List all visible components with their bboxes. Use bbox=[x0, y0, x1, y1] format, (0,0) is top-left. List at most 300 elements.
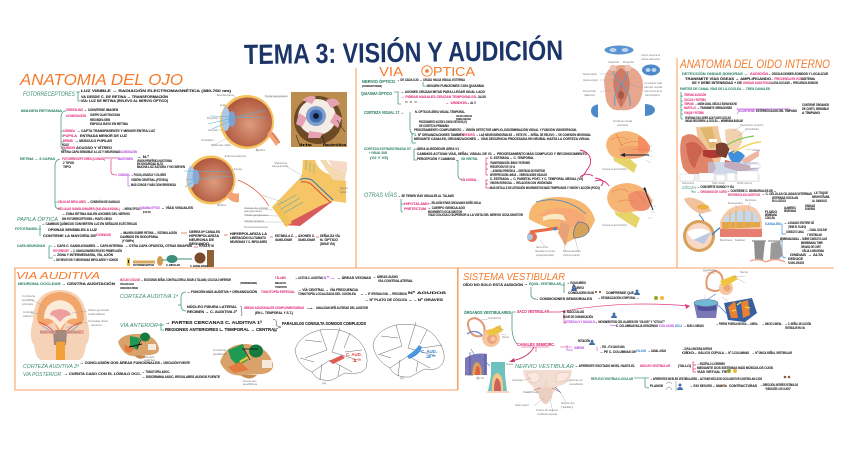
text block: cóclea: ÓRGANO DE CORTI bbox=[801, 244, 821, 249]
text block: neurona coclear bbox=[18, 274, 414, 290]
text block: corteza auditiva: TONOTOPÍA ESPECIAL bbox=[261, 289, 295, 294]
text block: imagen retiniana: REDONDEA SEMI bbox=[90, 117, 110, 122]
heading: anatomía del oído interno: ANATOMIA DEL OIDO INTERNO bbox=[679, 59, 830, 71]
text block: fotorreceptores bbox=[23, 88, 232, 103]
text block: retina: RETINA → 3 CAPAS bbox=[20, 156, 55, 161]
panel: vía óptica bbox=[361, 46, 663, 257]
text block: imagen retiniana: → CAPTA TRANSPARENTE Y MENOR ENTRA LUZ bbox=[77, 128, 156, 133]
image: ojo anatomía inferior bbox=[184, 154, 247, 207]
text block: retina bbox=[20, 154, 193, 214]
text block: fototransducción: → IMAGEN SOBRE RETINA → ESTIMULACIÓN bbox=[120, 230, 177, 235]
text block: nervio óptico: NERVIO ÓPTICO bbox=[362, 77, 395, 84]
text block: partes del oído: TÍMPANO bbox=[684, 101, 694, 106]
image: cresta ampular: Cresta bbox=[465, 373, 474, 377]
image: cerebro vía anterior pequeño bbox=[118, 332, 159, 362]
image: cabeza y vía auditiva: Núcleo geniculado bbox=[88, 308, 110, 312]
text block: cóclea: → CANAL COCLEAR bbox=[807, 227, 827, 232]
text block: corteza extraestriada: TRANSFORMACIÓN LÍNEAS Y PATRONES bbox=[490, 160, 530, 165]
text block: quiasma óptico: " " " bbox=[405, 100, 417, 105]
text block: cóclea: MEMBRANA bbox=[765, 212, 777, 217]
text block: corteza auditiva: CÓCLEA bbox=[393, 297, 407, 302]
text block: corteza visual v1: DE CORTEZA PRIMARIA bbox=[419, 123, 449, 128]
text block: nervio vestibular: → ENCÉFALO A CEREBRO bbox=[697, 361, 725, 366]
image: cerebro vía anterior grande: Área de asoc. bbox=[243, 379, 257, 383]
text block: órganos vestibulares: → PIERDE FUERZA MOVIDA → LINEAL bbox=[716, 321, 758, 326]
text block: cóclea: ESTEREOCILIOS AUDITIVOS bbox=[728, 192, 760, 197]
text block: capa neuronas: → OTRA CAPA OPUESTA, OTRAS SINAPSIS bbox=[125, 243, 192, 248]
diagram: neuronas de la retina bbox=[127, 250, 214, 268]
text block: órganos vestibulares: CANALES SEMICIRC. bbox=[517, 342, 555, 347]
text block: corteza extraestriada: PERCEPCIÓN Y CAMINOS bbox=[417, 156, 455, 161]
text block: imagen retiniana: ENTRADA MENOR DE LUZ bbox=[80, 133, 128, 138]
text block: detección de ondas sonoras: TRANSMITE VÍAS ÓSEAS → AMPLIFICANDO bbox=[685, 76, 771, 81]
text block: cóclea: → CONVIERTE SONIDO Y VÍA bbox=[697, 184, 734, 189]
image: ojo anatomía superior: Cristalino bbox=[201, 138, 215, 142]
image: cerebro vía anterior pequeño: Área asoc. bbox=[143, 355, 155, 359]
image: órgano de Corti: Estereocilios bbox=[728, 201, 744, 205]
image: cerebelo y núcleos vestibulares: Núcleos vestib. bbox=[523, 390, 539, 394]
text block: cóclea: INTERNAS OSCILAN bbox=[772, 195, 798, 200]
text block: cóclea: NEUROTRANS. bbox=[812, 194, 830, 199]
text block: neurona coclear: NÚCLEO COCLEAR bbox=[120, 277, 140, 282]
text block: detección de ondas sonoras: AUDICIÓN bbox=[750, 71, 768, 76]
image: cabeza y vía auditiva: Colículo bbox=[23, 310, 35, 314]
text block: retina: → POCOS, AGUDEZA Y COLORES bbox=[131, 172, 166, 177]
image: mapa cortical corteza auditiva secundaria: 2ª bbox=[426, 354, 436, 359]
text block: partes del oído: DE CORTI, SENSIBLE bbox=[802, 106, 829, 111]
text block: neurona coclear: TÁLAMO bbox=[275, 275, 286, 280]
heading: vía óptica bbox=[379, 65, 476, 79]
text block: reflejos vestíbulo-ocular: → MANT. bbox=[712, 383, 726, 388]
text block: corteza visual v1: MEDIANTE CANALES, ORGANIZACIONES → VÍAS SECUENCIA PROCESADA EN NEURAL HASTA LA CORTEZA VISUAL bbox=[414, 136, 590, 141]
text block: órganos vestibulares: C. COLUMNAS BAJA DESCENSO bbox=[616, 323, 658, 328]
text block: imagen retiniana: IRIS bbox=[63, 138, 74, 143]
text block: corteza auditiva: → bbox=[305, 305, 315, 310]
text block: corteza auditiva: → .. Nº GRAVES bbox=[408, 297, 443, 302]
text block: reflejos vestíbulo-ocular: → AFERENTES NIVELES VESTIBULARES bbox=[650, 376, 697, 381]
image: cerebro visto desde abajo: Izquierdo bbox=[608, 60, 620, 64]
text block: neurona coclear: 1º→ bbox=[323, 275, 336, 280]
text block: retina: CÉLULAS BIPOLARES bbox=[58, 199, 86, 204]
image: detalle de retina: sanguíneos bbox=[272, 164, 289, 168]
text block: oído no solo audición: → bbox=[524, 281, 528, 286]
text block: imagen retiniana: → MÚSCULO PUPILAR bbox=[75, 138, 112, 143]
text block: reflejos vestíbulo-ocular: → ACTIVAR NÚCLEOS OCULOMOTOR CONTROLAN OJOS bbox=[697, 376, 762, 381]
image: ojo anatomía inferior: Retina bbox=[217, 203, 227, 207]
text block: neurona coclear: CÓCLEAS HACIA bbox=[120, 281, 134, 286]
image: ojo anatomía superior: Músculo ciliar bbox=[211, 143, 231, 147]
text block: órganos vestibulares: → TIPOS → Nº 1/2 CANALES LINEAL bbox=[600, 344, 625, 349]
image: ojo anatomía superior: Esclerótica bbox=[217, 93, 235, 97]
text block: cóclea: ONDAS bbox=[790, 252, 806, 257]
text block: detección de ondas sonoras: → FRECUENCIA EN VOZ bbox=[771, 76, 801, 81]
text block: nervio vestibular: NERVIO VESTIBULAR bbox=[515, 364, 574, 370]
image: laberinto vestibular superior: Conductos bbox=[703, 268, 717, 272]
image: laberinto vestibular superior bbox=[700, 268, 749, 304]
text block: retina: → VÍAS VISUALES bbox=[161, 205, 193, 210]
text block: cóclea: NEURONAS bbox=[784, 208, 796, 213]
image: ojo anatomía superior bbox=[201, 93, 289, 152]
text block: corteza extraestriada: CORTEZA EXTRAESTRIADA OT bbox=[364, 146, 411, 151]
text block: fototransducción: CONTIENE LA MAYORÍA DE bbox=[43, 233, 96, 238]
image: ojo anatomía inferior: Fotorreceptores bbox=[225, 154, 247, 158]
text block: corteza auditiva: RECIBEN → C. AUDITIVA 2ª bbox=[187, 309, 238, 314]
text block: retina: → NERVIO ÓPTICO bbox=[122, 206, 140, 211]
image: ojo anatomía inferior: Fóvea bbox=[234, 167, 243, 171]
text block: retina: EN OSCURIDAD ALTA bbox=[137, 161, 163, 166]
text block: corteza auditiva 2ª y vía posterior: → CUENTA CASO CON EL LÓBULO OCC. bbox=[64, 371, 141, 376]
image: cabeza y vía auditiva: Núcleos bbox=[67, 330, 82, 334]
text block: corteza auditiva: (EN L. TEMPORAL Y S.T.) bbox=[255, 310, 294, 315]
icon: persona reflejo bbox=[677, 384, 683, 390]
text block: oído no solo audición: → CONDICIONES SENSORIALES bbox=[535, 296, 592, 301]
text block: otras vías: → CUERPO GENICULADO bbox=[428, 205, 465, 210]
text block: otras vías: PRETECTUM bbox=[404, 206, 426, 211]
text block: oído no solo audición: → EQUILIBRIO bbox=[567, 280, 586, 285]
text block: cóclea: → CONTIENE C. SENSORIALES DE ... bbox=[727, 188, 776, 193]
image: cerebro visto desde abajo: primaria bbox=[617, 123, 629, 127]
text block: fototransducción: CAMBIOS EN RODOPSINA bbox=[120, 234, 158, 239]
image: cerebro visto desde abajo: mas cerca de la bbox=[644, 89, 663, 93]
text block: imagen retiniana: ROJO bbox=[62, 142, 69, 147]
text block: neurona coclear: CONDUCCIÓN DE TÍMPANO bbox=[120, 285, 138, 290]
panel frames bbox=[14, 58, 834, 390]
text block: nervio vestibular: MEDIANTE DOS SISTEMAS MÁS MÚSCULOS OJOS bbox=[697, 365, 773, 370]
text block: órganos vestibulares: OÍDO bbox=[682, 350, 694, 355]
image: cerebro visto desde abajo: hemisferio bbox=[645, 93, 661, 97]
text block: órganos vestibulares: → C. SEÑAL DE ACCIÓN bbox=[785, 321, 811, 326]
text block: corteza auditiva 2ª y vía posterior: VIA POSTERIOR bbox=[23, 372, 61, 378]
text block: cóclea: CANALES bbox=[765, 221, 780, 226]
image: anatomía del oído: Oído medio bbox=[712, 181, 726, 185]
text block: corteza visual v1: PROCESAMIENTO COMPLEMENTO → VISIÓN DETECTOR AMPLIO, DISCRIMINACIÓN VISUAL Y FUNCIÓN VISIOESPACIAL bbox=[414, 127, 577, 132]
image: cerebelo y núcleos vestibulares: cerebelo bbox=[569, 382, 584, 386]
text block: fototransducción: GANGLIONAR bbox=[298, 237, 315, 242]
text block: oído no solo audición: MAREO bbox=[572, 285, 584, 290]
text block: corteza extraestriada bbox=[364, 146, 609, 190]
text block: cóclea: → ALTA bbox=[808, 252, 823, 257]
text block: neurona coclear: RELEVO bbox=[275, 281, 287, 285]
image: laberinto vestibular izquierdo: Conductos bbox=[488, 316, 502, 320]
text block: fototransducción: HIPERPOLARIZA LA bbox=[230, 231, 267, 236]
panel: anatomía del oído interno bbox=[679, 59, 830, 265]
text block: corteza visual v1: CORTEZA VISUAL 17 → bbox=[364, 110, 404, 115]
text block: imagen retiniana: → CONVERGE IMAGEN bbox=[84, 107, 118, 112]
text block: corteza extraestriada: C. ESTRIADA → C. TEMPORAL bbox=[490, 155, 534, 160]
image: cerebro lateral vía dorsal: Corteza temporal inferior bbox=[602, 223, 627, 227]
text block: fototransducción: N. ÓPTICO bbox=[320, 237, 338, 242]
text block: cóclea: CONDUCTO CANAL bbox=[786, 229, 804, 234]
text block: quiasma óptico bbox=[361, 89, 486, 105]
text block: órganos vestibulares: MÁCULA bbox=[675, 323, 682, 328]
text block: reflejos vestíbulo-ocular: PLANOS bbox=[650, 383, 663, 388]
image: cerebro corte sagital: Nervio óptico bbox=[536, 245, 548, 249]
text block: corteza extraestriada: PERCEPCIÓN TOP. V3 V4 bbox=[490, 164, 515, 169]
text block: órganos vestibulares: → Nº ÚNICA SEÑAL VESTIBULAR bbox=[752, 350, 792, 355]
text block: otras vías: → SE TIENEN VÍAS VISUALES AL TÁLAMO bbox=[398, 193, 454, 198]
text block: fotorreceptores: LUZ VISIBLE → RADIACIÓN ELECTROMAGNÉTICA (380-760 nm) bbox=[81, 88, 232, 93]
text block: fototransducción: LIBERACIÓN GLUTAMATO bbox=[230, 235, 266, 240]
text block: corteza auditiva: ANALIZAN SEÑ ALTERAS DEL AUDITOR bbox=[316, 305, 368, 310]
text block: cóclea: → LIGADO ENTRE SÍ bbox=[784, 220, 815, 225]
text block: cóclea: (TIENE EL FLUIDO) bbox=[788, 224, 806, 229]
text block: papila óptica: → ZONA RETINA SALEN AXONES DEL NERVIO bbox=[62, 211, 130, 216]
text block: reflejos vestíbulo-ocular: → DIRECCIÓN, INTERÉS ESTÍMULOS bbox=[760, 382, 798, 387]
text block: partes del oído: CONTIENE bbox=[739, 108, 755, 113]
text block: capa neuronas: FOTORRECEP. bbox=[53, 248, 69, 253]
text block: corteza auditiva: CORTEZA AUDITIVA 1ª bbox=[120, 294, 178, 300]
image: órgano de Corti: Membrana bbox=[720, 238, 733, 242]
image: cabeza y vía auditiva: Corteza bbox=[22, 294, 36, 298]
text block: retina: CÉLULAS GANGLIONARES (SALIDA AXONAL) bbox=[58, 206, 120, 211]
text block: corteza extraestriada: CAMINOS ACTIVAN VÍAS, SEÑAL VISUAL DE V1 → PROCESAMIENTO MÁS COMPLEJO Y RECONOCIMIENTO bbox=[417, 151, 587, 156]
text block: retina: TIPO bbox=[63, 164, 71, 169]
text block: órganos vestibulares: CILIOS bbox=[636, 348, 646, 353]
text block: reflejos vestíbulo-ocular bbox=[591, 376, 798, 391]
text block: corteza visual v1: FORMA CERCANA bbox=[456, 117, 471, 121]
text block: corteza extraestriada: VÍA VENTRAL bbox=[461, 156, 478, 161]
text block: órganos vestibulares: → CANAL AGUA bbox=[648, 348, 666, 353]
image: cabeza y vía auditiva: inferior bbox=[23, 314, 33, 318]
text block: nervio óptico bbox=[362, 77, 484, 88]
image: cerebelo y núcleos vestibulares bbox=[512, 370, 584, 416]
text block: partes del oído: MARTILLO bbox=[684, 105, 696, 110]
image: laberinto vestibular izquierdo: Nervio bbox=[502, 335, 510, 339]
text block: nervio óptico: → DE CADA OJO → CRUZA HACIA VISUAL EXTERNA bbox=[397, 77, 465, 82]
image: cerebro corte sagital bbox=[527, 197, 595, 257]
text block: corteza auditiva: → bbox=[360, 291, 364, 296]
text block: corteza auditiva: Nº AGUDOS bbox=[408, 290, 447, 295]
text block: partes del oído: A TÍMPANO bbox=[802, 110, 820, 115]
arrow: del ojo al detalle de retina bbox=[238, 180, 269, 206]
text block: reflejos vestíbulo-ocular: "DEDUCIR LOS OJOS" bbox=[765, 386, 791, 391]
text block: reflejos vestíbulo-ocular: CONTRACTURAS bbox=[729, 383, 757, 388]
text block: órganos vestibulares: VESTIBULAR EN V.M. bbox=[785, 325, 805, 330]
text block: cóclea: Y VESTIBULAR bbox=[807, 232, 822, 237]
text block: imagen retiniana: HUMOR bbox=[62, 145, 75, 150]
text block: fototransducción: CIERRA Nᵃ CANALES bbox=[189, 229, 220, 234]
text block: partes del oído: → UNIÓN CANAL OSÍCULO SUENA MUCHO bbox=[695, 101, 737, 106]
image: detalle de retina bbox=[244, 160, 349, 229]
image: cerebro corte sagital: Mesencéfalo bbox=[563, 249, 582, 253]
text block: reflejos vestíbulo-ocular: REFLEJO VESTÍBULO-OCULAR bbox=[591, 376, 633, 381]
text block: cóclea bbox=[682, 184, 830, 265]
text block: imagen retiniana: ENFOCA RAYO EN RETINA bbox=[90, 121, 128, 126]
text block: fototransducción: → CAMBIOS QUÍMICOS CONVIERTEN LUZ EN SEÑALES ELÉCTRICAS bbox=[42, 221, 137, 226]
text block: capa neuronas bbox=[17, 243, 214, 262]
text block: órganos vestibulares: → GÁLICO CÚPULA bbox=[694, 350, 724, 355]
image: fotografía del ojo: Iris bbox=[300, 143, 313, 147]
text block: órganos vestibulares: CILIOS bbox=[659, 323, 674, 328]
heading: anatomía del ojo: ANATOMIA DEL OJO bbox=[19, 72, 183, 89]
text block: fototransducción: FOTOTRANSD. bbox=[15, 226, 38, 231]
panel: anatomía del ojo bbox=[15, 72, 349, 268]
text block: quiasma óptico: → FIBRAS NASALES CRUZAN TEMPORALES bbox=[401, 94, 476, 99]
text block: órganos vestibulares: → PE C. COLUMNAS DE bbox=[600, 349, 636, 354]
text block: cóclea: CÓCLEA bbox=[682, 184, 696, 190]
text block: corteza auditiva bbox=[120, 287, 447, 316]
text block: cóclea: ONDAS bbox=[805, 203, 815, 208]
text block: órganos vestibulares: SIGUE DE COMUNICACIÓN bbox=[563, 314, 593, 319]
text block: detección de ondas sonoras: DETECCIÓN ONDAS SONORAS → bbox=[682, 71, 748, 76]
text block: retina: 2 TIPOS bbox=[63, 160, 74, 165]
image: cabeza y vía auditiva: auditiva bbox=[22, 298, 35, 302]
image: detalle de retina: Fotorreceptores bbox=[244, 225, 269, 229]
image: cabeza y vía auditiva bbox=[22, 290, 110, 360]
text block: corteza auditiva 2ª y vía posterior: → CONCLUSIÓN DOS ÁREAS FUNCIONALES bbox=[80, 360, 160, 365]
text block: detección de ondas sonoras bbox=[682, 71, 828, 85]
image: ojo anatomía superior: Pupila bbox=[207, 116, 218, 120]
text block: órganos vestibulares: ROTACIÓN bbox=[578, 338, 590, 343]
text block: fototransducción: (SIGUE VÍA) bbox=[320, 241, 335, 246]
image: cabeza y vía auditiva: medial (tálamo) bbox=[88, 312, 105, 316]
text block: neurona coclear: (TRANSMISORES) bbox=[240, 281, 257, 285]
text block: retina: (LVD V1) bbox=[143, 210, 151, 214]
text block: corteza extraestriada: INTERPRETACIÓN LINEAS → ORIENTACIONES VISUALES bbox=[490, 172, 547, 177]
text block: retina: FOTORRECEPTORES (CONOS) bbox=[62, 156, 106, 161]
panel: sistema vestibular bbox=[463, 268, 811, 416]
image: detalle de retina: óptico bbox=[340, 190, 348, 194]
text block: fotorreceptores: FOTORRECEPTORES bbox=[23, 92, 75, 98]
text block: corteza auditiva 2ª y vía posterior: CORTEZA AUDITIVA 2ª bbox=[23, 364, 79, 370]
image: mapa cortical corteza auditiva primaria: 1ª bbox=[352, 358, 362, 363]
heading: sistema vestibular: SISTEMA VESTIBULAR bbox=[463, 271, 565, 283]
text block: capa neuronas: → DE RELEVOS Y NEURONAS BIPOLARES Y CONOS bbox=[53, 257, 118, 262]
text block: capa neuronas: CAPA NEURONAS bbox=[17, 243, 45, 248]
text block: capa neuronas: → ZONA Y INTERMEDIARIA, VÍA, AXÓN bbox=[53, 252, 113, 257]
image: cerebelo y núcleos vestibulares: Cerebelo bbox=[512, 378, 523, 382]
text block: cóclea: AL GANGLIO bbox=[812, 198, 827, 203]
image: órgano de Corti bbox=[720, 198, 762, 242]
text block: corteza visual v1: → Nº ORGANIZACIONES TAMBIÉN bbox=[414, 132, 464, 137]
image: mapa cortical corteza auditiva secundaria bbox=[373, 322, 444, 380]
text block: fototransducción: CONOS bbox=[96, 232, 111, 237]
text block: cóclea: → C. CÉLULAS CILIADAS INTERNAS bbox=[762, 191, 812, 196]
image: laberinto vestibular izquierdo bbox=[467, 316, 510, 347]
text block: neurona coclear: NEURONA COCLEAR → bbox=[18, 281, 66, 286]
text block: fototransducción: SEGUNDO bbox=[189, 241, 209, 246]
image: cabeza y vía auditiva: superior bbox=[91, 323, 102, 327]
text block: nervio óptico: (CONDUCTORES) bbox=[362, 84, 382, 88]
text block: detección de ondas sonoras: ONDAS AUDITIVAS bbox=[743, 80, 771, 85]
image: cerebro corte sagital: supraquiasmático) bbox=[536, 253, 554, 257]
text block: detección de ondas sonoras: SE Y DEBE INTENSIDAD + DE bbox=[692, 80, 742, 85]
image: detalle de retina: ganglionares bbox=[244, 209, 263, 213]
text block: cóclea: CÓCLEA bbox=[765, 215, 775, 220]
text block: neurona coclear: TONOTOP. bbox=[275, 285, 287, 289]
image: cerebro vía anterior grande: auditiva bbox=[243, 382, 258, 386]
image: cerebro lateral vía ventral bbox=[602, 131, 652, 173]
image: cerebro visto desde abajo: Campo visual de la bbox=[641, 53, 660, 57]
image: detalle de retina: Células ganglionares bbox=[244, 213, 269, 217]
text block: fototransducción: OPSINAS SENSIBLES A LUZ bbox=[48, 227, 98, 232]
image: cerebro visto desde abajo: retina derecha bbox=[641, 57, 661, 61]
image: fotografía del ojo bbox=[291, 92, 347, 147]
text block: corteza auditiva: NÚCLEO FISURA LATERAL bbox=[187, 304, 238, 309]
image: cabeza y vía auditiva: primaria bbox=[22, 302, 34, 306]
text block: cóclea: MEMBRANA TIMP. bbox=[801, 240, 823, 245]
text block: fototransducción: GANGLIONAR bbox=[275, 237, 292, 242]
image: cerebro vía anterior grande bbox=[213, 344, 273, 386]
text block: cóclea: DEDUCE bbox=[788, 256, 803, 261]
image: anatomía del oído: Oído externo bbox=[682, 181, 694, 185]
text block: partes del oído: ONDAS RECORREN LA COCLEA → MEMBRANA BASILAR bbox=[685, 118, 743, 123]
image: cerebelo y núcleos vestibulares: (tallo) bbox=[561, 405, 573, 409]
text block: imagen retiniana: ACOMODACIÓN bbox=[66, 113, 86, 118]
text block: imagen retiniana: IMAGEN RETINIANA bbox=[21, 108, 62, 113]
panel: vía auditiva bbox=[16, 271, 447, 386]
image: laberinto vestibular superior: Nervio bbox=[740, 270, 749, 274]
text block: otras vías: HIPOTÁLAMO bbox=[404, 201, 429, 206]
text block: otras vías bbox=[364, 192, 523, 217]
text block: corteza auditiva: TONOTOPÍA LOCALIZADA DEL COCHLEA bbox=[298, 291, 356, 296]
image: mapa cortical corteza auditiva primaria: (a) bbox=[322, 381, 326, 385]
text block: vía anterior: VIA ANTERIOR bbox=[120, 323, 158, 329]
text block: neurona coclear: → ÁREAS VECINAS bbox=[337, 275, 371, 280]
text block: órganos vestibulares: → MOVIMIENTOS CELULARES EN "CILIOS" Y "OTOLIT" bbox=[595, 319, 665, 324]
text block: corteza visual v1: PROCESAMIENTO ACCEDE A CONOS VISTOS EN (V1) bbox=[419, 119, 467, 124]
image: cerebelo y núcleos vestibulares: Axones en bbox=[569, 378, 584, 382]
image: detalle de retina: Células bipolares bbox=[244, 219, 265, 223]
text block: imagen retiniana: CRISTALINO bbox=[66, 107, 83, 112]
text block: reflejos vestíbulo-ocular: → RAY SEGURO bbox=[690, 383, 712, 388]
text block: corteza visual v1: REDES bbox=[463, 132, 475, 137]
icon: persona azul bbox=[634, 290, 640, 295]
text block: neurona coclear: VÍA CONTRALATERAL bbox=[378, 278, 414, 283]
image: mapa cortical corteza auditiva secundaria: (b) bbox=[400, 376, 404, 380]
image: cerebelo y núcleos vestibulares: Núcleos vest. bbox=[561, 401, 575, 405]
text block: oído no solo audición: EQUIL. VESTIBULAR bbox=[529, 281, 561, 286]
text block: fototransducción: HIPERPOLARIZA bbox=[189, 233, 219, 238]
text block: partes del oído: → TRANSMITE VIBRACIONES bbox=[697, 105, 732, 110]
image: cerebro corte sagital: Hipotálamo (núcleo bbox=[535, 249, 555, 253]
text block: partes del oído: PARTES DE CANAL VÍAS DE LA COCLEA → TRES CANALES bbox=[680, 86, 770, 91]
text block: imagen retiniana: CUERPO CILIAR TRACCIONA bbox=[90, 112, 120, 117]
image: cerebro vía anterior pequeño: auditiva bbox=[144, 358, 156, 362]
text block: corteza visual v1: COLOR LOBULAR bbox=[456, 114, 472, 118]
text block: nervio óptico: SIGUEN FUNCIONES CON QUIASMA bbox=[427, 83, 484, 88]
diagram: neuronas de la retina: C. GANGLIONAR bbox=[190, 264, 209, 268]
image: detalle de retina: Nervio bbox=[340, 186, 349, 190]
text block: corteza auditiva 2ª y vía posterior: → UBICACIÓN FUENTE bbox=[160, 360, 190, 365]
text block: quiasma óptico: → UNIDOS bbox=[445, 100, 467, 105]
text block: corteza auditiva: → VÍA CENTRAL → VÍA FRECUENCIA bbox=[298, 287, 358, 292]
text block: corteza visual v1: → LAS NEUROSENSORIALES → ESTE ES → SEÑAL DE RELEVO → DE CONEXIÓN NEURONAL bbox=[476, 132, 591, 137]
diagram: neuronas de la retina: C. BIPOLAR bbox=[166, 263, 181, 267]
image: cerebro lateral vía dorsal bbox=[602, 183, 656, 228]
text block: partes del oído: CONTIENE ÓRGANOS bbox=[802, 102, 829, 107]
text block: retina: MUCHA LUZ SATURA Y NO SIRVEN bbox=[137, 164, 185, 169]
text block: nervio vestibular: VÍAS VIRTUAL TRI bbox=[697, 369, 727, 374]
heading: vía auditiva: VIA AUDITIVA bbox=[16, 271, 100, 282]
image: cerebro visto desde abajo: Quiasma óptico bbox=[583, 78, 598, 82]
image: ojo anatomía superior: Retina bbox=[256, 148, 266, 152]
text block: fotorreceptores: VÍA: LUZ DE RETINA (RELEVO AL NERVIO ÓPTICO) bbox=[81, 98, 169, 103]
text block: órganos vestibulares bbox=[464, 304, 811, 362]
text block: vía anterior: PARALELOS CONSULTA SONIDOS COMPLEJOS bbox=[282, 321, 366, 326]
text block: corteza visual v1 bbox=[364, 109, 591, 143]
text block: corteza extraestriada: → AGNOSIA PERIÓDICA → IDENTIDAD DE ROSTROS bbox=[490, 168, 545, 173]
text block: fototransducción: SEÑALIZA VÍA bbox=[320, 233, 340, 238]
text block: corteza extraestriada: (V2 Y V3) bbox=[370, 155, 389, 160]
text block: corteza extraestriada: ÁREA ALREDEDOR ÁREA V1 bbox=[417, 146, 460, 151]
image: cerebelo y núcleos vestibulares: Núcleo superior bbox=[515, 403, 529, 407]
text block: detección de ondas sonoras: SISTEMA bbox=[801, 76, 815, 81]
text block: cóclea: ALIMENTA bbox=[784, 205, 796, 210]
text block: fototransducción: NEURONAS Y C. BIPOLARES bbox=[230, 239, 267, 244]
text block: órganos vestibulares: COMPONE bbox=[574, 345, 584, 350]
icon: persona vestibular bbox=[589, 313, 617, 345]
